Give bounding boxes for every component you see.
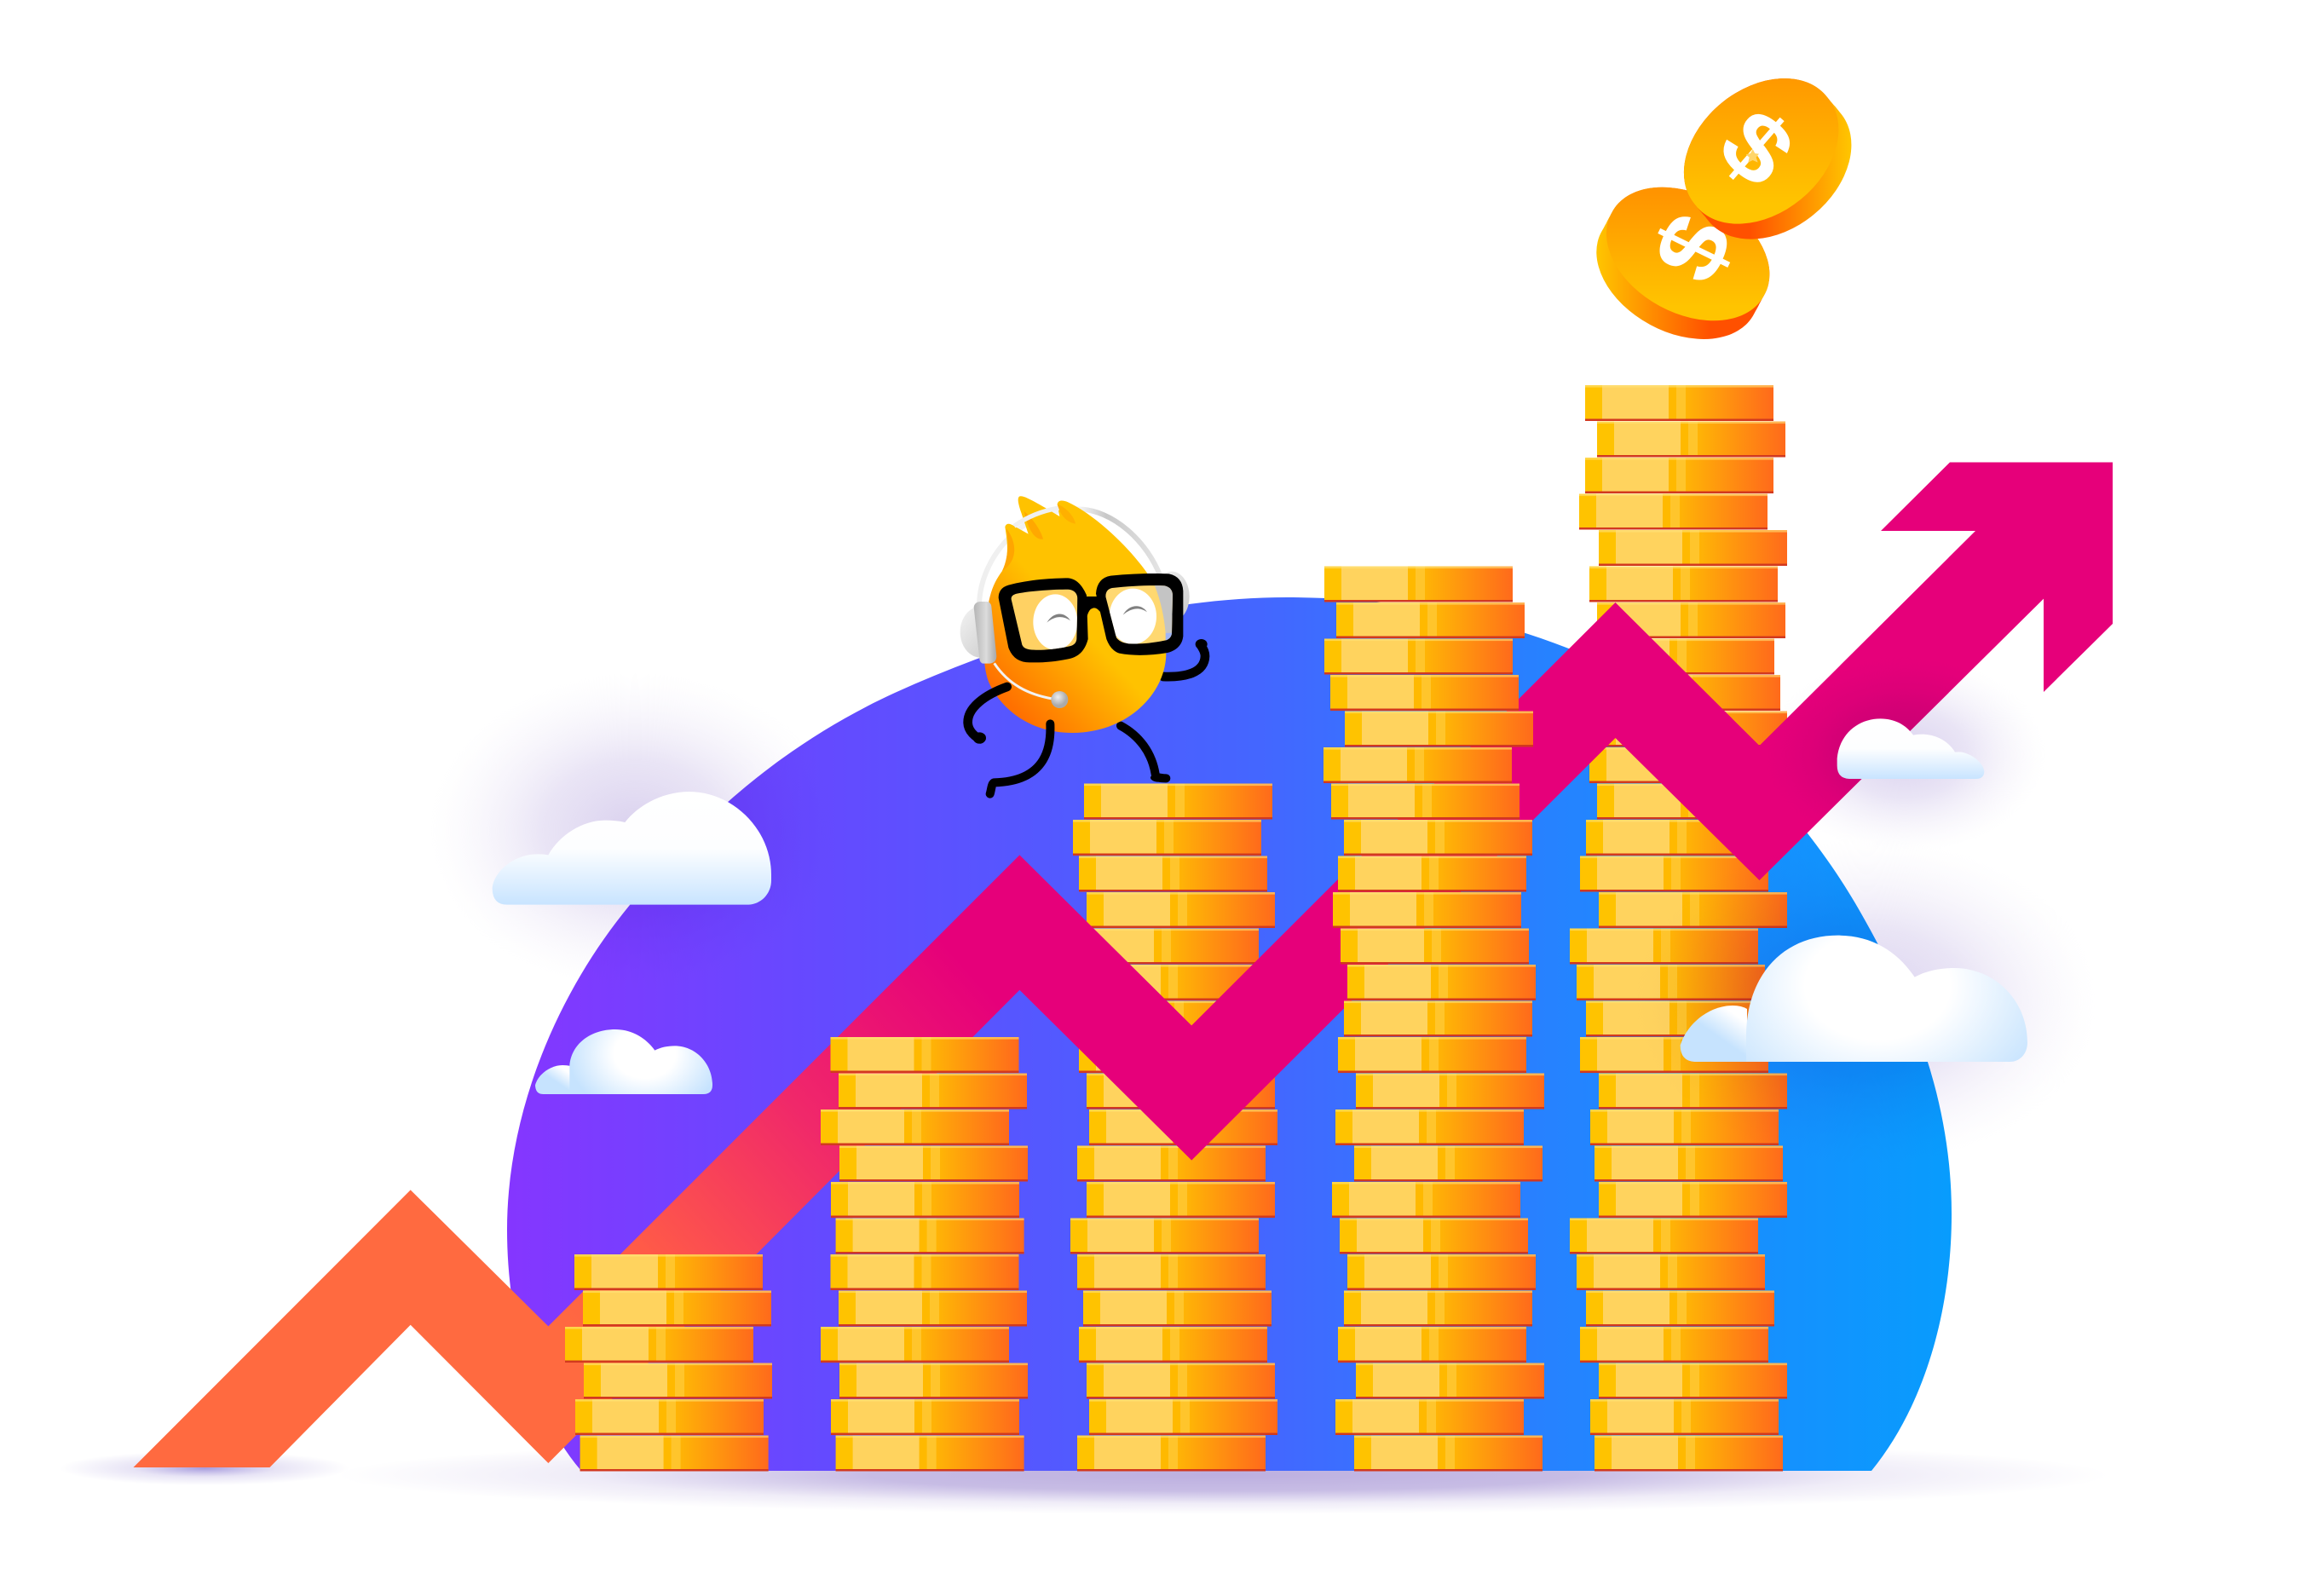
coin stack 1	[565, 1254, 772, 1471]
upper dollar coin	[1684, 78, 1851, 239]
zigzag growth arrow	[133, 462, 2113, 1467]
blue-purple background blob	[507, 597, 1952, 1471]
lower dollar coin: $	[1633, 198, 1754, 297]
illustration: growth arrow with coin stacks and mascot	[82, 78, 2113, 1510]
cloud: small left	[535, 1029, 712, 1094]
coin stack 2	[821, 1037, 1028, 1471]
cloud: small right	[1837, 718, 1984, 779]
coin stack 4	[1323, 566, 1544, 1471]
cloud: large left	[493, 792, 771, 905]
cloud: large right	[1681, 936, 2027, 1062]
coin stack 5	[1570, 385, 1787, 1471]
lower dollar coin	[1596, 187, 1769, 339]
mascot: flame character with glasses and headset	[960, 496, 1208, 794]
upper dollar coin: $	[1699, 89, 1814, 208]
falling coins	[1596, 78, 1851, 339]
coin stack 3	[1070, 784, 1277, 1471]
